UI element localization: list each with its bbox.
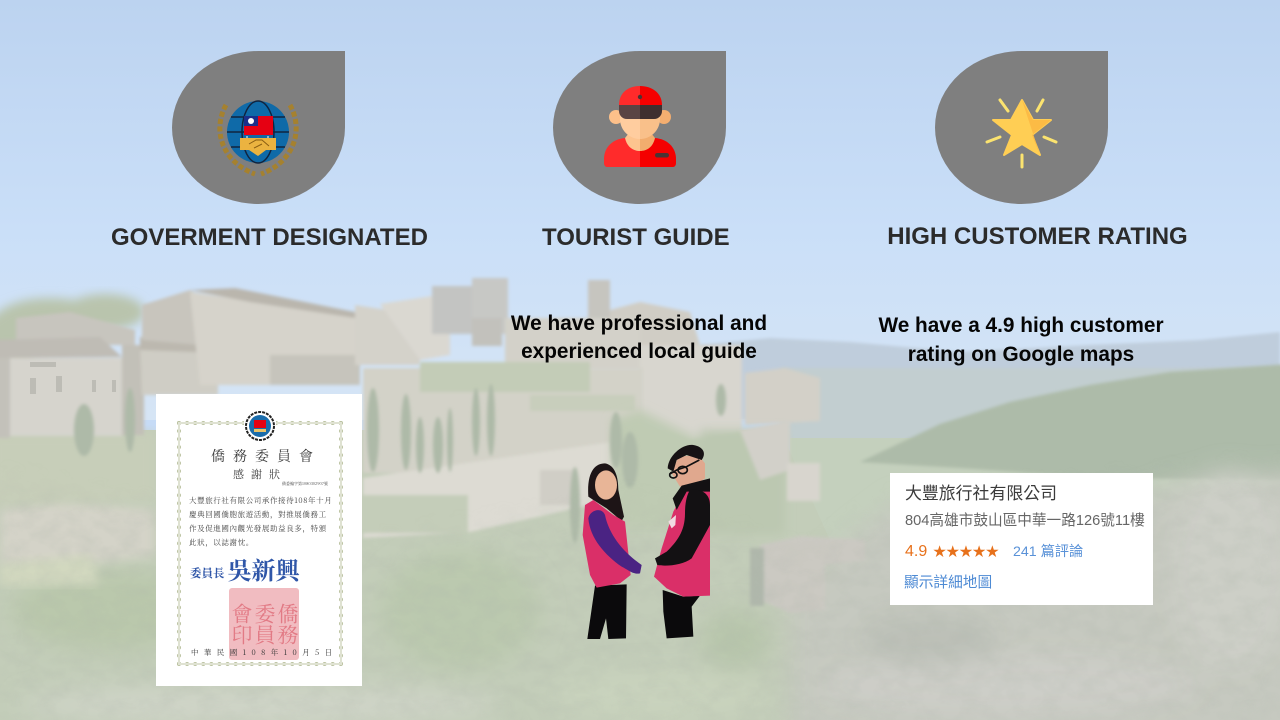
certificate body text	[189, 495, 332, 548]
certificate subtitle: 感謝狀	[233, 466, 287, 482]
village buildings	[0, 278, 820, 440]
lower ground	[0, 430, 1280, 720]
rating and reviews: 241 篇評論	[1013, 544, 1083, 560]
heading: tourist guide: TOURIST GUIDE	[542, 224, 730, 251]
icon: shining star	[986, 98, 1058, 168]
rating and reviews	[905, 543, 1083, 560]
map link: 顯示詳細地圖	[904, 575, 992, 591]
foliage texture	[0, 440, 1280, 720]
business name: 大豐旅行社有限公司	[905, 484, 1057, 503]
Google Maps rating card	[890, 473, 1153, 605]
woman	[583, 463, 642, 639]
certificate body text: 慶典回國僑胞旅遊活動，對推展僑務工	[189, 509, 327, 520]
rating and reviews: ★★★★★	[933, 544, 999, 559]
rock outcrop and left vegetation	[0, 500, 155, 566]
text: guide description: experienced local guide	[521, 340, 757, 363]
certificate of appreciation	[156, 394, 362, 686]
certificate red seal	[229, 588, 299, 660]
terraces and sloping wall	[363, 362, 643, 538]
icon panel: tourist guide	[553, 51, 726, 204]
certificate body text: 大豐旅行社有限公司承作接待108年十月	[189, 495, 332, 506]
heading: high customer rating: HIGH CUSTOMER RATING	[887, 223, 1188, 250]
icon panel: government designated	[172, 51, 345, 204]
text: rating description	[878, 314, 1164, 366]
text: rating description: rating on Google maps	[908, 343, 1134, 366]
text: rating description: We have a 4.9 high customer	[878, 314, 1164, 337]
text: guide description: We have professional and	[511, 312, 767, 335]
windows	[30, 362, 116, 394]
text: guide description	[510, 312, 767, 363]
cypress trees	[74, 384, 726, 543]
heading: government designated: GOVERMENT DESIGNATED	[111, 224, 428, 251]
certificate body text: 此狀，以誌謝忱。	[189, 537, 254, 548]
certificate title: 僑務委員會	[211, 446, 321, 466]
certificate signature: 委員長吳新興	[190, 551, 300, 586]
icon: guide with red cap	[604, 86, 676, 167]
address: 804高雄市鼓山區中華一路126號11樓	[905, 513, 1145, 529]
certificate serial number: 僑委編字第1080302907號	[282, 481, 328, 487]
certificate red seal: 委員	[250, 603, 280, 645]
certificate decorative border	[177, 421, 343, 666]
certificate body text: 作及促進國內觀光發展助益良多，特頒	[189, 523, 327, 534]
far mountains, valley and green hill	[700, 332, 1280, 420]
photo: two tour guides in pink vests	[582, 444, 710, 639]
rating and reviews: 4.9	[905, 543, 927, 560]
man	[654, 445, 710, 638]
certificate date: 中華民國108年10月5日	[191, 647, 338, 658]
certificate emblem	[244, 411, 276, 441]
icon: overseas community affairs emblem	[217, 100, 299, 176]
icon panel: high customer rating	[935, 51, 1108, 204]
